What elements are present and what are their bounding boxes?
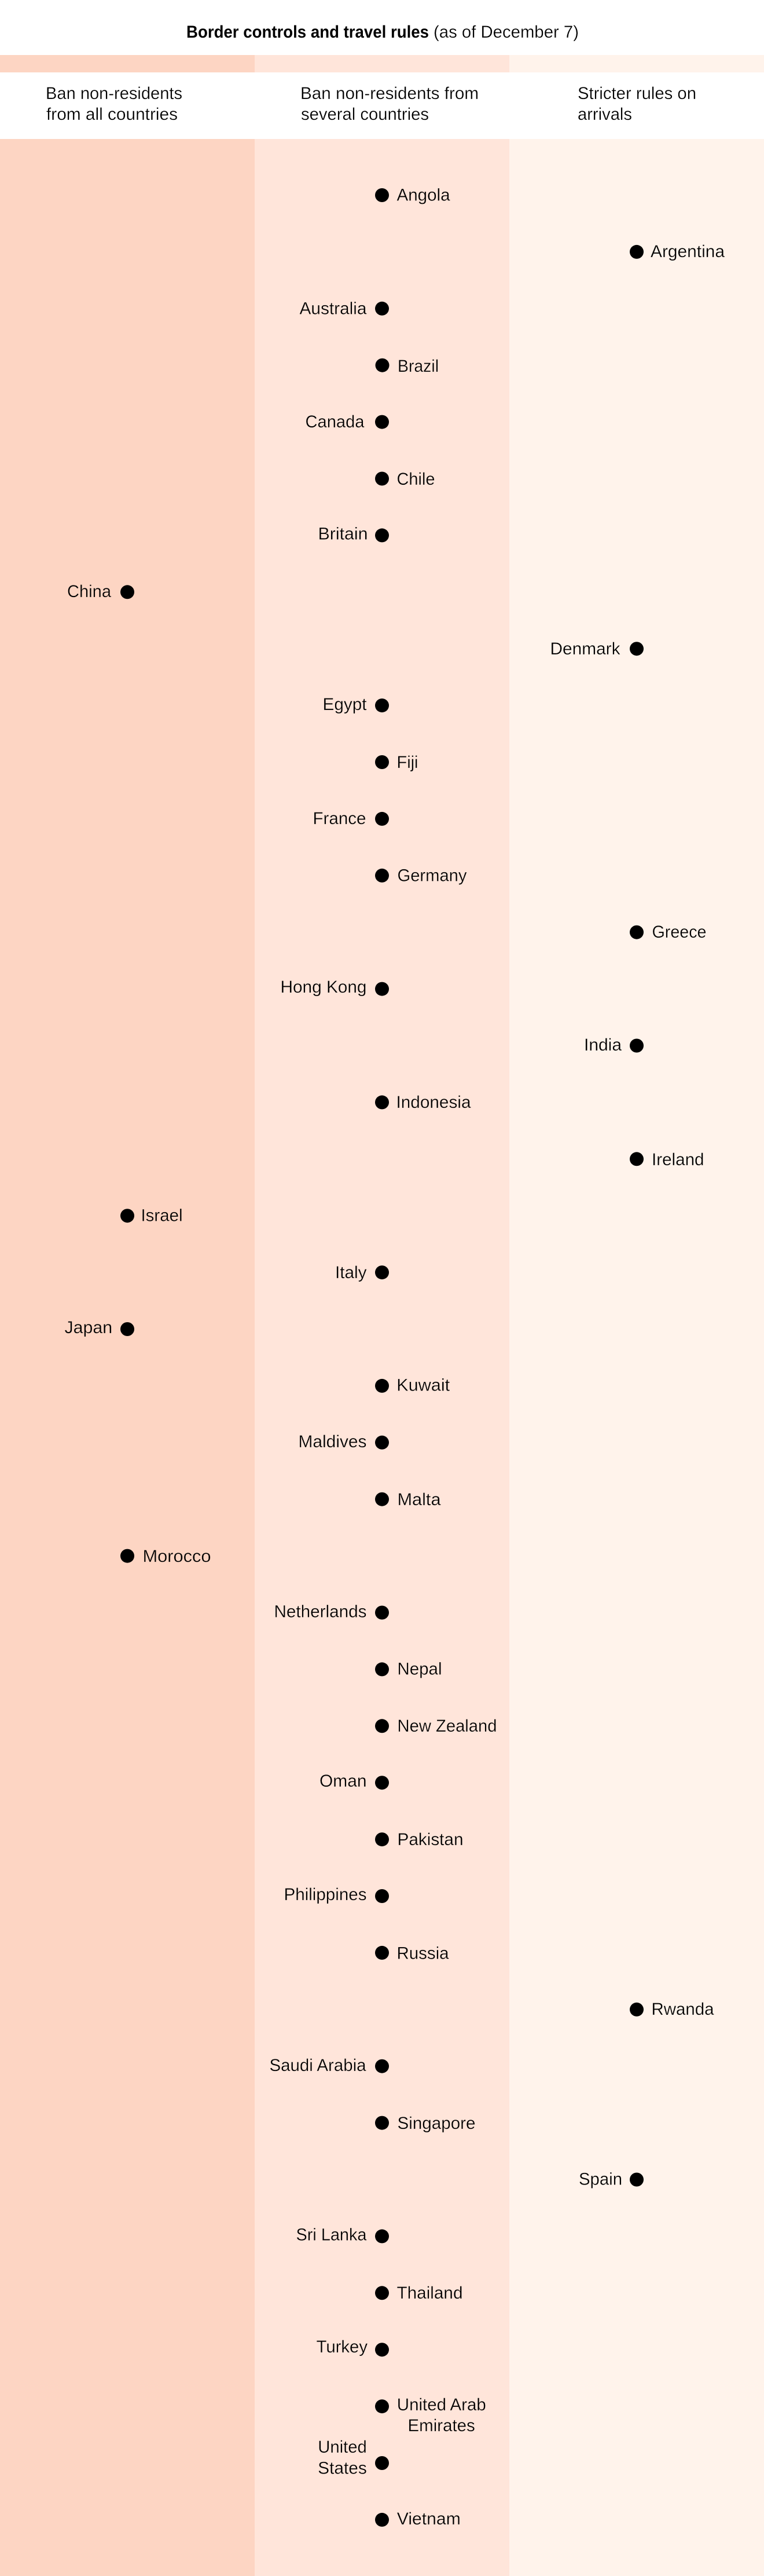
country: Malta bbox=[375, 1490, 441, 1509]
country: Greece: Greece bbox=[652, 923, 706, 942]
country: Britain: Britain bbox=[318, 525, 368, 543]
country: Kuwait bbox=[375, 1376, 450, 1395]
country: Singapore: Singapore bbox=[397, 2114, 476, 2133]
country: Oman bbox=[319, 1772, 389, 1791]
country: Pakistan: Pakistan bbox=[397, 1830, 463, 1849]
country: United States bbox=[318, 2438, 389, 2478]
column heading: ban from all countries bbox=[46, 84, 182, 124]
country: Japan bbox=[65, 1318, 134, 1337]
country: Spain bbox=[579, 2169, 644, 2189]
country: Egypt: Egypt bbox=[323, 695, 367, 714]
country: Israel: Israel bbox=[141, 1206, 183, 1225]
country: United States: States bbox=[318, 2459, 367, 2478]
country: Turkey: Turkey bbox=[316, 2337, 368, 2357]
country: Australia: Australia bbox=[300, 299, 367, 319]
country: Maldives: Maldives bbox=[299, 1432, 367, 1451]
country: Saudi Arabia: Saudi Arabia bbox=[270, 2056, 366, 2075]
country: China: China bbox=[67, 582, 112, 601]
country: Indonesia: Indonesia bbox=[396, 1093, 471, 1112]
country: Kuwait: Kuwait bbox=[396, 1376, 450, 1395]
country: Angola: Angola bbox=[397, 185, 450, 205]
country: Greece bbox=[630, 923, 706, 942]
country: Vietnam: Vietnam bbox=[397, 2509, 461, 2529]
column heading: ban from several countries bbox=[300, 84, 479, 124]
column heading: ban from several countries: Ban non-residents from bbox=[300, 84, 479, 103]
country: New Zealand: New Zealand bbox=[397, 1717, 497, 1736]
country: China bbox=[67, 582, 134, 601]
column heading: ban from several countries: several countries bbox=[301, 105, 429, 124]
country: Canada: Canada bbox=[306, 412, 365, 431]
country: Germany: Germany bbox=[397, 866, 467, 885]
country: United Arab Emirates: United Arab bbox=[397, 2395, 486, 2414]
country: Morocco: Morocco bbox=[142, 1547, 211, 1566]
country: France bbox=[313, 809, 389, 828]
country: Russia: Russia bbox=[397, 1944, 449, 1963]
country: Israel bbox=[120, 1206, 183, 1225]
country: Chile: Chile bbox=[397, 470, 435, 489]
country: Hong Kong: Hong Kong bbox=[280, 978, 367, 997]
country: Fiji: Fiji bbox=[397, 753, 418, 772]
country: Denmark: Denmark bbox=[550, 639, 620, 658]
country: India: India bbox=[584, 1035, 622, 1055]
country: United States: United bbox=[318, 2438, 367, 2457]
panel: ban non-residents from several countries bbox=[255, 139, 509, 2576]
country: France: France bbox=[313, 809, 366, 828]
country: Japan: Japan bbox=[65, 1318, 112, 1337]
title: (as of December 7) bbox=[434, 23, 579, 42]
country: Egypt bbox=[323, 695, 389, 714]
country: Spain: Spain bbox=[579, 2169, 622, 2189]
country: Nepal: Nepal bbox=[397, 1660, 442, 1678]
column heading: stricter rules: arrivals bbox=[578, 105, 632, 124]
country: Oman: Oman bbox=[319, 1772, 367, 1791]
country: Brazil: Brazil bbox=[398, 357, 439, 376]
country: Thailand: Thailand bbox=[397, 2284, 463, 2303]
country: Britain bbox=[318, 525, 389, 543]
column heading: ban from all countries: from all countries bbox=[46, 105, 178, 124]
column heading: stricter rules: Stricter rules on bbox=[578, 84, 696, 103]
country: United Arab Emirates: Emirates bbox=[407, 2416, 475, 2435]
country: Philippines: Philippines bbox=[284, 1885, 367, 1904]
panel: ban non-residents from all countries bbox=[0, 139, 255, 2576]
country: Brazil bbox=[375, 357, 439, 376]
country: Nepal bbox=[375, 1660, 442, 1678]
country: Malta: Malta bbox=[397, 1490, 441, 1509]
country: Sri Lanka: Sri Lanka bbox=[296, 2225, 367, 2245]
country: Argentina: Argentina bbox=[651, 242, 725, 261]
column heading: stricter rules bbox=[578, 84, 696, 124]
country: Rwanda: Rwanda bbox=[652, 2000, 714, 2019]
country: United Arab Emirates bbox=[375, 2395, 486, 2435]
country: Italy bbox=[335, 1263, 389, 1282]
country: Ireland: Ireland bbox=[652, 1150, 704, 1169]
column heading: ban from all countries: Ban non-residents bbox=[46, 84, 182, 103]
panel: stricter rules on arrivals bbox=[509, 139, 764, 2576]
country: Fiji bbox=[375, 753, 418, 772]
country: India bbox=[584, 1035, 644, 1055]
country: Chile bbox=[375, 470, 435, 489]
country: Italy: Italy bbox=[335, 1263, 367, 1282]
country: Netherlands: Netherlands bbox=[274, 1602, 367, 1622]
colour key strip bbox=[0, 55, 764, 72]
title bbox=[186, 23, 579, 42]
title: Border controls and travel rules bbox=[186, 23, 429, 42]
